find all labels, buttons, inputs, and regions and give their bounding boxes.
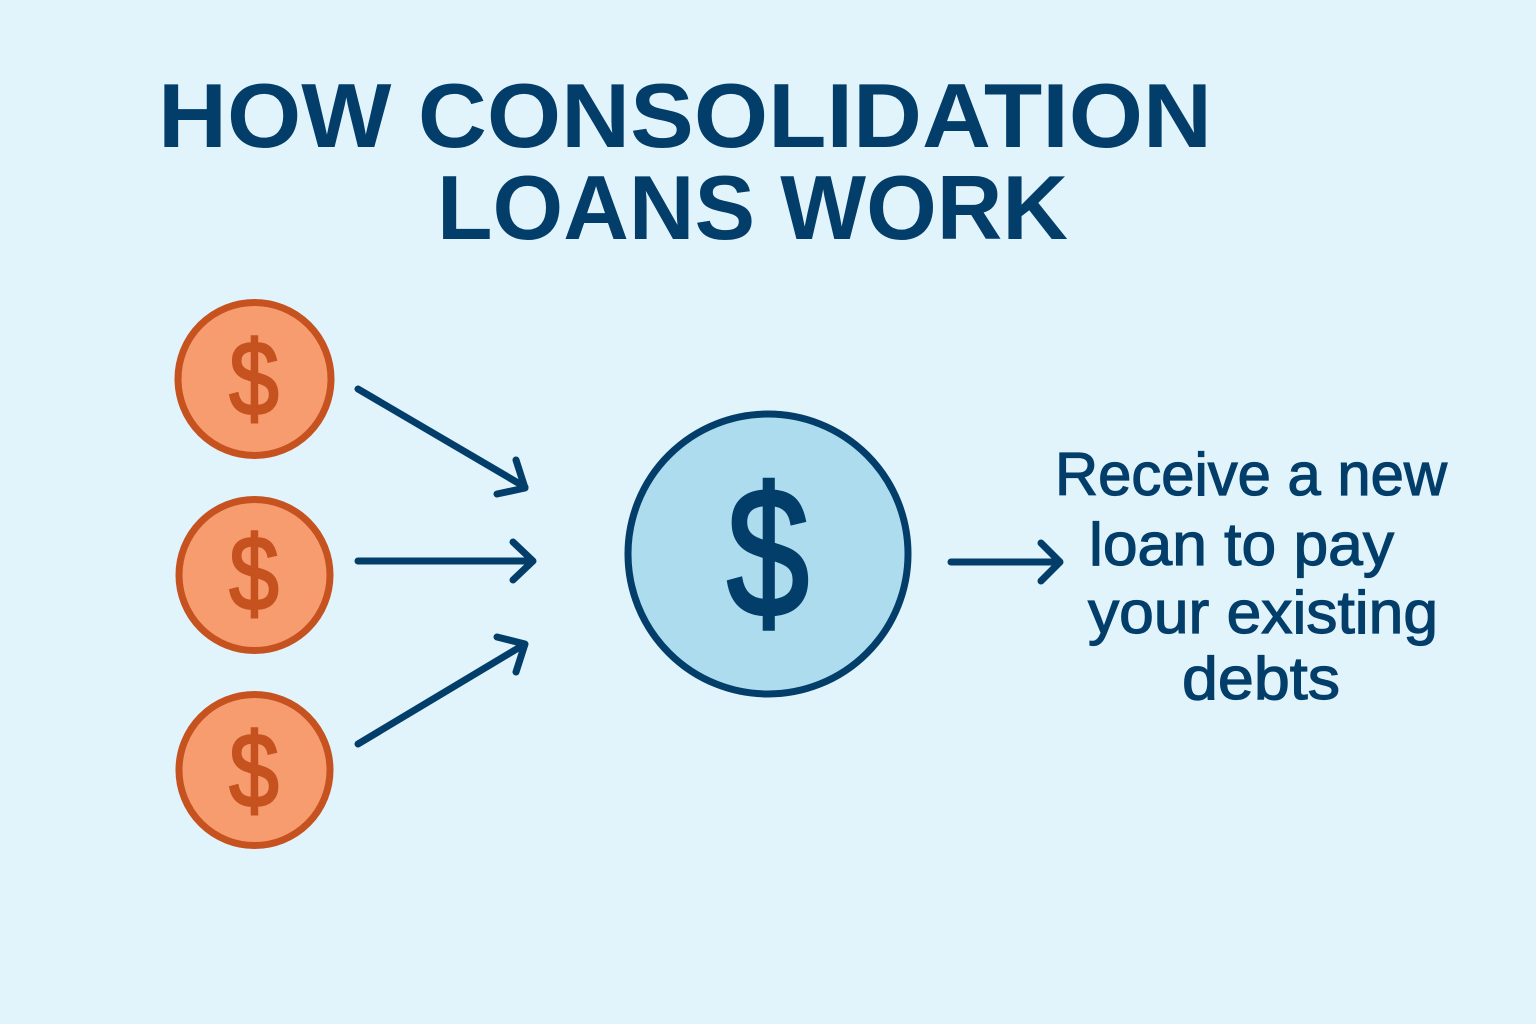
icon: debt coin 3: [179, 694, 330, 846]
text block: result description: Receive a new: [1055, 441, 1448, 508]
icon: debt coin 2: [179, 500, 330, 650]
title: [158, 66, 1212, 259]
title: LOANS WORK: [437, 158, 1068, 259]
arrow: coin 3 to loan: [358, 637, 525, 744]
icon: debt coin 1: [178, 302, 331, 456]
icon: debt coin 1: $: [229, 319, 279, 438]
text block: result description: your existing: [1088, 579, 1438, 646]
text block: result description: loan to pay: [1089, 511, 1394, 578]
icon: consolidated loan coin: [628, 414, 908, 694]
arrow: coin 2 to loan: [358, 542, 533, 580]
title: HOW CONSOLIDATION: [158, 66, 1212, 167]
arrow: loan to result: [951, 543, 1060, 581]
arrow: coin 1 to loan: [358, 389, 525, 494]
icon: consolidated loan coin: $: [727, 450, 809, 656]
text block: result description: debts: [1182, 645, 1340, 712]
text block: result description: [1055, 441, 1448, 712]
icon: debt coin 3: $: [229, 711, 279, 830]
icon: debt coin 2: $: [229, 514, 279, 633]
